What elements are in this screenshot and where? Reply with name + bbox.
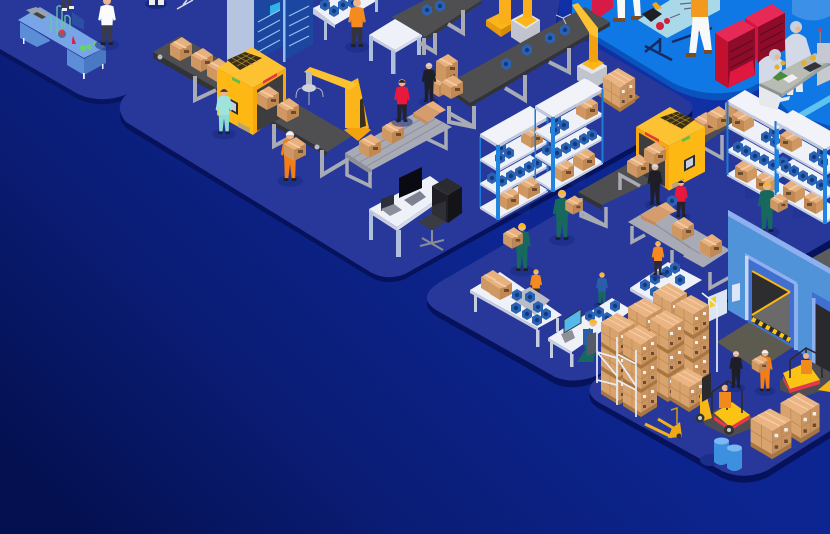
band behind main floor [520, 0, 830, 160]
worker orange vest at table two [649, 241, 667, 279]
orange worker with box in warehouse [752, 350, 775, 396]
stand base [177, 0, 193, 9]
computer desk with seated worker [548, 298, 632, 367]
yellow robot bases [486, 0, 540, 47]
roller conveyor two [628, 202, 730, 288]
warehouse pallet rack [597, 283, 717, 417]
shelving unit 2 [534, 78, 604, 192]
red storage cabinets [715, 4, 785, 88]
worker carrying box [277, 131, 306, 187]
conveyor with gadgets [445, 7, 610, 127]
top conveyor belt [392, 0, 482, 55]
worker at bench [594, 272, 610, 309]
worker orange vest at table [528, 269, 544, 306]
forklift one [696, 373, 752, 437]
computer desk [369, 167, 450, 257]
standing technician in clean suit [785, 21, 812, 95]
packing table one [470, 270, 562, 347]
office chair [418, 201, 446, 250]
electrical panel [708, 289, 727, 322]
workbench with parts [638, 0, 720, 60]
open cardboard box [413, 101, 446, 125]
boxes leaving machine [257, 86, 299, 122]
shelving unit 3 [726, 90, 796, 204]
lab desk [18, 6, 106, 79]
white table with gadgets [313, 0, 378, 40]
shelving unit 4 [774, 110, 830, 224]
box pile behind supervisor [429, 54, 463, 99]
pallet of boxes front [751, 408, 791, 459]
boxes on conveyor [170, 37, 229, 82]
computer tower [432, 178, 462, 223]
grey support column [227, 0, 254, 62]
scientist in white coat [95, 0, 119, 50]
yellow machine two [636, 107, 705, 191]
loading dock floor [717, 320, 793, 370]
panel: main production floor [120, 0, 693, 282]
pallet of boxes near conveyor [597, 68, 640, 112]
seated technician in clean suit [759, 49, 790, 108]
conveyor behind machine two [694, 96, 752, 158]
packing table two [630, 262, 702, 308]
yellow machine one [217, 47, 286, 135]
worker in red shirt [391, 79, 413, 127]
shelving unit 1 [480, 106, 548, 220]
technician in teal [212, 88, 236, 139]
worker in red holding gadget [667, 180, 690, 221]
shoes of person at top [145, 0, 167, 9]
panel: packing floor [427, 98, 830, 387]
cylindrical tank [792, 0, 830, 21]
worker green overalls one [549, 190, 583, 246]
white side table [369, 19, 422, 74]
engineer with white trousers [686, 0, 712, 57]
second scientist legs [61, 0, 74, 11]
panel: bright blue clean-room platform [572, 0, 830, 130]
server cabinets [254, 0, 313, 62]
robot arm on pedestal [556, 3, 607, 90]
panel: laboratory platform [0, 0, 232, 104]
worker in orange vest [345, 0, 369, 52]
conveyor one [153, 36, 352, 175]
conveyor two [578, 157, 655, 226]
worker carrying box on packing floor [503, 223, 534, 276]
pallet truck [645, 408, 682, 438]
blue barrels [700, 438, 742, 471]
warehouse wall with loading doors [728, 210, 830, 385]
supervisor shaking hands [645, 164, 665, 210]
roller conveyor [345, 110, 452, 186]
worker green overalls two [754, 182, 788, 238]
conveyor strip cyan [790, 95, 830, 124]
yellow robot arm [296, 67, 371, 141]
clean room desk [759, 28, 830, 110]
supervisor in warehouse [727, 351, 745, 392]
red cabinet small at top [592, 0, 613, 17]
pallet of boxes beside forklift [671, 368, 705, 412]
panel: warehouse floor [589, 250, 830, 483]
pallet of boxes right [780, 392, 820, 443]
boxes entering machine two [627, 142, 666, 178]
forklift two [780, 340, 830, 398]
lab chair [72, 12, 84, 30]
worker with white trousers [613, 0, 642, 22]
supervisor in suit [419, 63, 439, 106]
